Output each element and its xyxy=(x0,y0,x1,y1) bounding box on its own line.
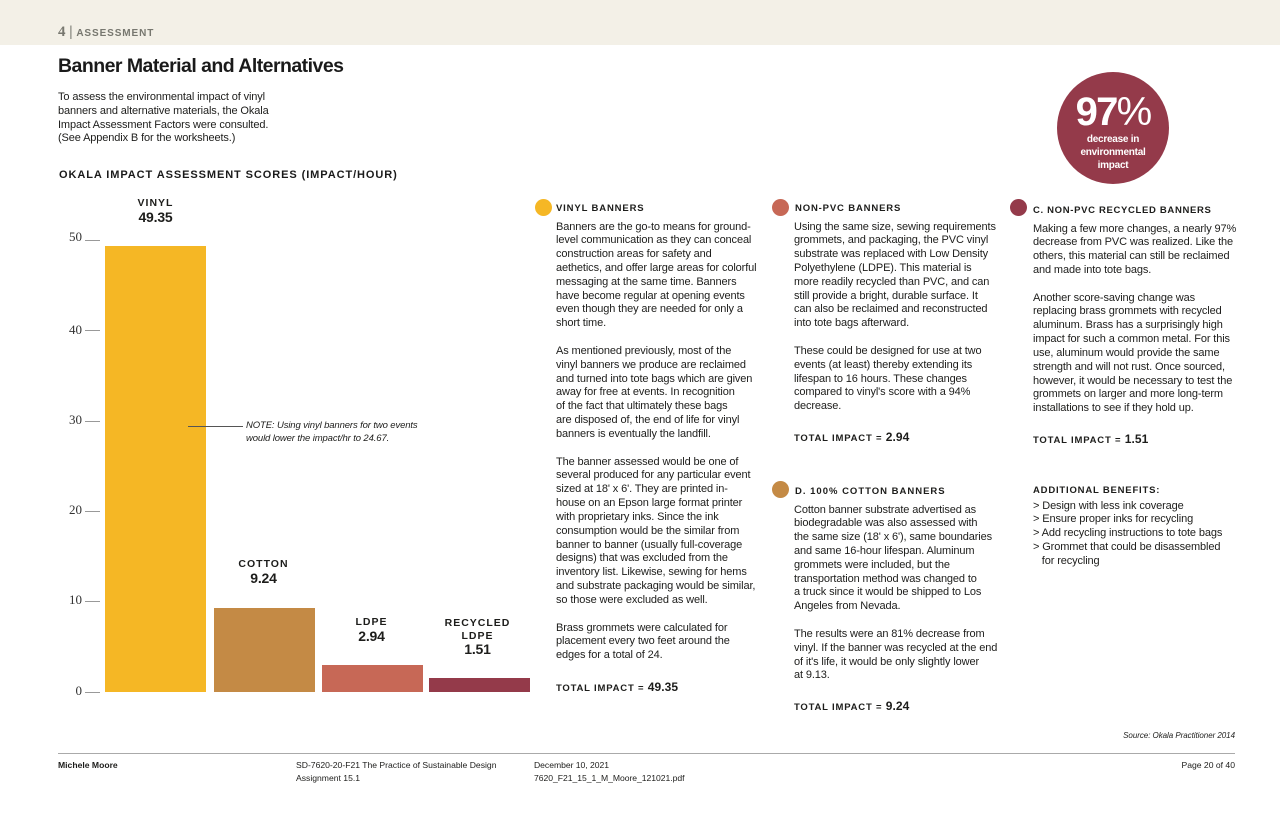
footer: course xyxy=(296,760,496,782)
bar chart: 30 xyxy=(69,412,82,427)
footer rule xyxy=(58,753,1235,754)
callout text xyxy=(1080,134,1146,171)
body text: The results were an 81% decrease from xyxy=(794,628,985,640)
body text: have become regular at opening events xyxy=(556,290,745,302)
annotation note: would lower the impact/hr to 24.67. xyxy=(246,433,389,444)
label: LDPE xyxy=(355,616,388,644)
body text: inventory list. Likewise, sewing for hems xyxy=(556,566,747,578)
source note: Source: Okala Practitioner 2014 xyxy=(1123,731,1235,740)
body text: house on an Epson large format printer xyxy=(556,497,742,509)
body text: away for free at events. In recognition xyxy=(556,386,735,398)
intro text xyxy=(58,91,269,144)
label: vinyl: VINYL xyxy=(138,197,173,209)
body text: however, it would be necessary to test the xyxy=(1033,375,1232,387)
footer: course: Assignment 15.1 xyxy=(296,772,360,782)
intro text: Impact Assessment Factors were consulted. xyxy=(58,119,268,131)
total: TOTAL IMPACT = 49.35 xyxy=(556,680,678,694)
label: vinyl xyxy=(138,197,173,225)
body text: at 9.13. xyxy=(794,669,830,681)
body text: vinyl banners we produce are reclaimed xyxy=(556,359,746,371)
body text: Cotton banner substrate advertised as xyxy=(794,504,976,516)
body text: and turned into tote bags which are given xyxy=(556,373,752,385)
body text: vinyl. If the banner was recycled at the end xyxy=(794,642,997,654)
body text: grommets on larger and more long-term xyxy=(1033,388,1223,400)
footer: date and file xyxy=(534,760,685,783)
body text: edges for a total of 24. xyxy=(556,649,663,661)
body text: of the fact that ultimately these bags xyxy=(556,400,728,412)
body text: substrate was replaced with Low Density xyxy=(794,248,988,260)
body text: Brass grommets were calculated for xyxy=(556,622,727,634)
footer: date and file: December 10, 2021 xyxy=(534,760,609,770)
footer: course: SD-7620-20-F21 The Practice of Sustainable Design xyxy=(296,760,496,770)
panel: non-PVC banners xyxy=(772,199,996,444)
body text: use, aluminum would provide the same xyxy=(1033,347,1219,359)
heading: ADDITIONAL BENEFITS: xyxy=(1033,485,1160,496)
annotation leader xyxy=(188,426,243,427)
body text: sized at 18' x 6'. They are printed in- xyxy=(556,483,728,495)
panel: cotton banners xyxy=(772,481,997,713)
icon: tan dot xyxy=(772,481,789,498)
body text: of it's life, it would be only slightly lower xyxy=(794,656,979,668)
label: recycled LDPE xyxy=(445,616,510,656)
bar chart: 40 xyxy=(69,322,82,337)
total: TOTAL IMPACT = 1.51 xyxy=(1033,432,1148,446)
body text: Angeles from Nevada. xyxy=(794,600,900,612)
body text: and substrate packaging would be similar, xyxy=(556,580,755,592)
heading: D. 100% COTTON BANNERS xyxy=(795,486,946,497)
footer: page number: Page 20 of 40 xyxy=(1181,760,1235,770)
body text: so those were excluded as well. xyxy=(556,594,708,606)
footer: date and file: 7620_F21_15_1_M_Moore_121021.pdf xyxy=(534,772,685,782)
total: TOTAL IMPACT = 2.94 xyxy=(794,430,909,444)
list xyxy=(1033,500,1222,567)
header band xyxy=(0,0,1280,45)
list: > Ensure proper inks for recycling xyxy=(1033,513,1193,525)
label: cotton: 9.24 xyxy=(250,570,277,586)
body text xyxy=(794,504,997,681)
body text: and same 16-hour lifespan. Aluminum xyxy=(794,545,974,557)
body text: These could be designed for use at two xyxy=(794,345,981,357)
body text: biodegradable was also assessed with xyxy=(794,517,977,529)
icon: maroon dot xyxy=(1010,199,1027,216)
total: TOTAL IMPACT = 9.24 xyxy=(794,699,909,713)
panel: additional benefits xyxy=(1033,485,1222,567)
panel: recycled banners xyxy=(1010,199,1236,446)
icon: coral dot xyxy=(772,199,789,216)
panel: vinyl banners xyxy=(535,199,756,694)
body text: aluminum. Brass has a surprisingly high xyxy=(1033,319,1223,331)
section label: 4 | ASSESSMENT xyxy=(58,24,154,40)
body text: still provide a bright, durable surface. It xyxy=(794,290,978,302)
body text: placement every two feet around the xyxy=(556,635,730,647)
label: vinyl: 49.35 xyxy=(138,209,173,225)
label: LDPE: 2.94 xyxy=(358,628,385,644)
bar: recycled LDPE xyxy=(429,678,530,692)
bar chart xyxy=(69,197,530,698)
body text: consumption would be the similar from xyxy=(556,525,739,537)
body text: strength and will not rust. Once sourced, xyxy=(1033,361,1225,373)
body text: messaging at the same time. Banners xyxy=(556,276,736,288)
body text: with proprietary inks. Since the ink xyxy=(556,511,719,523)
chart heading: OKALA IMPACT ASSESSMENT SCORES (IMPACT/HOUR) xyxy=(59,169,398,181)
footer: author: Michele Moore xyxy=(58,760,118,770)
list: > Add recycling instructions to tote bags xyxy=(1033,527,1222,539)
body text: designs) that was excluded from the xyxy=(556,552,728,564)
body text: decrease from PVC was realized. Like the xyxy=(1033,236,1233,248)
body text: several produced for any particular event xyxy=(556,469,750,481)
y axis xyxy=(69,229,100,698)
list: > Grommet that could be disassembled xyxy=(1033,541,1220,553)
callout text: environmental xyxy=(1080,147,1146,158)
body text: level communication as they can conceal xyxy=(556,234,751,246)
body text: aethetics, and offer large areas for colorful xyxy=(556,262,756,274)
label: cotton: COTTON xyxy=(238,558,289,570)
body text: can also be reclaimed and reconstructed xyxy=(794,303,987,315)
body text: grommets, and packaging, the PVC vinyl xyxy=(794,234,988,246)
body text: a truck since it would be shipped to Los xyxy=(794,586,981,598)
bar: LDPE xyxy=(322,665,423,692)
label: recycled LDPE: LDPE xyxy=(461,630,494,642)
heading: NON-PVC BANNERS xyxy=(795,203,901,214)
intro text: (See Appendix B for the worksheets.) xyxy=(58,132,235,144)
body text: are disposed of, the end of life for vinyl xyxy=(556,414,739,426)
body text: events (at least) thereby extending its xyxy=(794,359,972,371)
callout text: decrease in xyxy=(1087,134,1139,145)
body text xyxy=(556,220,756,661)
bar chart: 50 xyxy=(69,229,82,244)
annotation note: NOTE: Using vinyl banners for two events xyxy=(246,420,418,431)
body text: impact for such a common metal. For this xyxy=(1033,333,1230,345)
callout text: impact xyxy=(1098,160,1128,171)
body text: even though they are needed for only a xyxy=(556,303,743,315)
list: > Design with less ink coverage xyxy=(1033,500,1184,512)
big number: 97% xyxy=(1076,90,1150,134)
body text: Banners are the go-to means for ground- xyxy=(556,220,751,232)
body text: into tote bags afterward. xyxy=(794,317,909,329)
intro text: banners and alternative materials, the Okala xyxy=(58,105,269,117)
bar chart: 20 xyxy=(69,502,82,517)
heading: C. NON-PVC RECYCLED BANNERS xyxy=(1033,205,1212,216)
label: cotton xyxy=(238,558,289,586)
body text: Polyethylene (LDPE). This material is xyxy=(794,262,972,274)
body text: others, this material can still be reclaimed xyxy=(1033,250,1229,262)
body text: Making a few more changes, a nearly 97% xyxy=(1033,222,1236,234)
body text: construction areas for safety and xyxy=(556,248,712,260)
body text: Using the same size, sewing requirements xyxy=(794,220,996,232)
body text: more readily recycled than PVC, and can xyxy=(794,276,989,288)
body text: short time. xyxy=(556,317,606,329)
body text: decrease. xyxy=(794,400,841,412)
title: Banner Material and Alternatives xyxy=(58,55,343,77)
label: LDPE: LDPE xyxy=(355,616,388,628)
body text xyxy=(794,220,996,412)
body text: installations to see if they hold up. xyxy=(1033,402,1194,414)
icon: yellow dot xyxy=(535,199,552,216)
body text: As mentioned previously, most of the xyxy=(556,345,731,357)
label: recycled LDPE: RECYCLED xyxy=(445,616,510,628)
list: for recycling xyxy=(1042,555,1100,567)
body text: compared to vinyl's score with a 94% xyxy=(794,386,970,398)
body text: grommets were included, but the xyxy=(794,559,950,571)
intro text: To assess the environmental impact of vinyl xyxy=(58,91,265,103)
body text xyxy=(1033,222,1236,414)
body text: replacing brass grommets with recycled xyxy=(1033,305,1222,317)
body text: and made into tote bags. xyxy=(1033,264,1151,276)
bar chart: 0 xyxy=(76,683,82,698)
body text: banners is eventually the landfill. xyxy=(556,428,711,440)
body text: The banner assessed would be one of xyxy=(556,456,738,468)
body text: Another score-saving change was xyxy=(1033,292,1195,304)
bar chart: 10 xyxy=(69,592,82,607)
label: recycled LDPE: 1.51 xyxy=(464,640,491,656)
heading: VINYL BANNERS xyxy=(556,203,644,214)
callout: 97% decrease xyxy=(1057,72,1169,184)
bar: vinyl xyxy=(105,246,206,692)
body text: lifespan to 16 hours. These changes xyxy=(794,373,967,385)
body text: banner to banner (usually full-coverage xyxy=(556,539,742,551)
annotation note xyxy=(246,420,418,444)
body text: transportation method was changed to xyxy=(794,573,977,585)
body text: the same size (18' x 6'), same boundaries xyxy=(794,531,992,543)
bar: cotton xyxy=(214,608,315,692)
